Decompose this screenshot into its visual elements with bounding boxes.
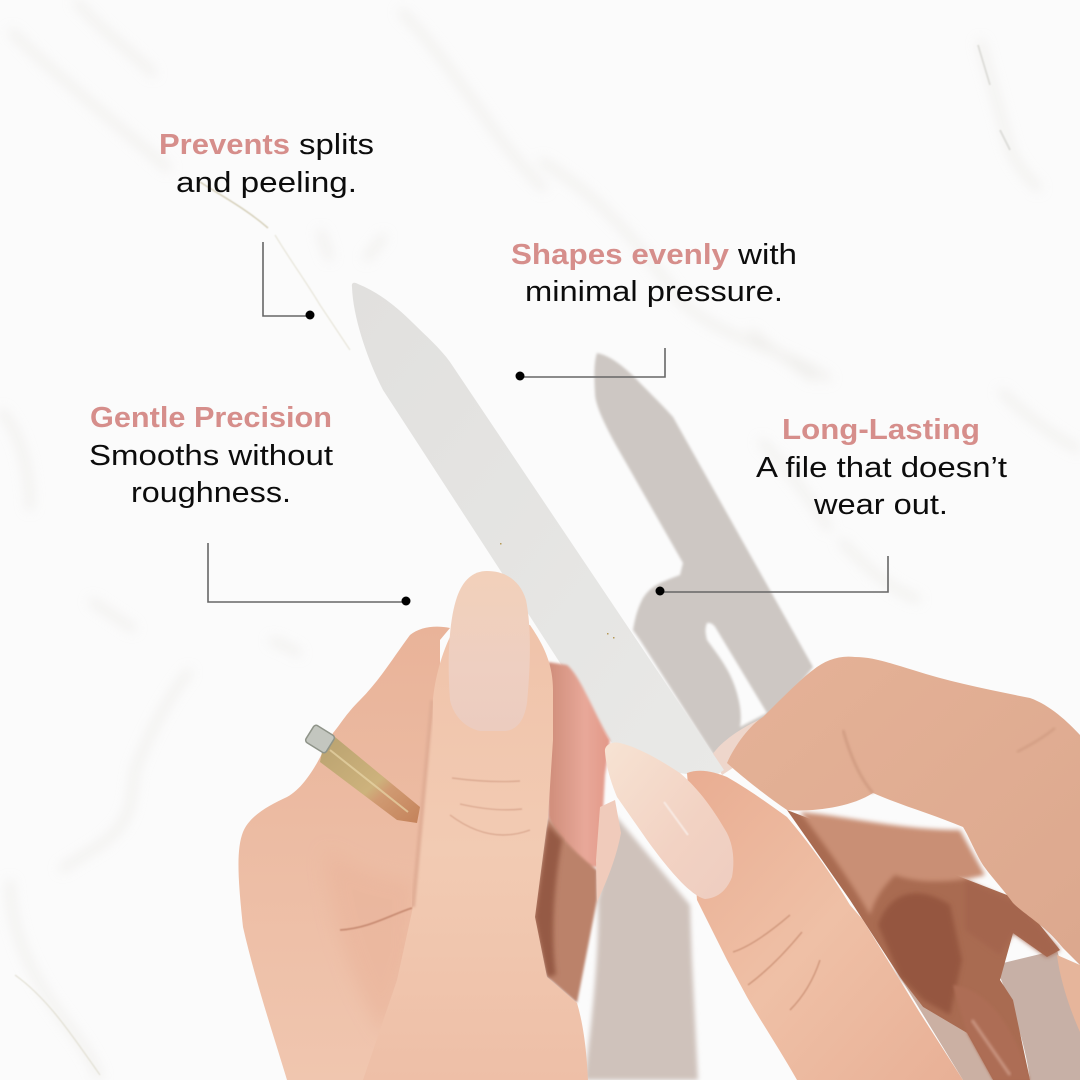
callout: long-lasting: Long-Lasting (782, 414, 980, 446)
index nail (605, 742, 733, 899)
peeking fingernails (712, 715, 770, 775)
callout: shapes evenly: Shapes evenly (511, 239, 729, 271)
callout: long-lasting: wear out. (813, 489, 948, 521)
middle finger (548, 662, 610, 867)
lower right skin (1057, 955, 1080, 1032)
index finger (687, 771, 963, 1080)
lower shadow (584, 815, 1080, 1080)
thumb (363, 620, 588, 1080)
nail file (352, 283, 724, 778)
leader line: gentle (208, 543, 410, 606)
callout: long-lasting (756, 414, 1007, 521)
ring (305, 724, 420, 823)
leader line: long-lasting (656, 556, 888, 596)
left hand (238, 571, 621, 1080)
file shadow (594, 353, 813, 765)
callout: prevents splits: Prevents (159, 129, 290, 161)
callout: shapes evenly: with (737, 239, 797, 271)
callout: gentle precision: Gentle Precision (90, 402, 332, 434)
thumb nail (449, 571, 530, 731)
callout: prevents splits (159, 129, 374, 199)
callout: gentle precision: Smooths without (89, 440, 333, 472)
leader line: shapes (516, 348, 665, 380)
back of hand (238, 627, 450, 1080)
callout: gentle precision: roughness. (131, 477, 291, 509)
side nail sliver (596, 800, 621, 902)
callout: long-lasting: A file that doesn’t (756, 452, 1007, 484)
dark gap behind thumb (533, 817, 597, 1003)
callout: prevents splits: and peeling. (176, 167, 357, 199)
leader line: prevents (263, 242, 314, 320)
callout: shapes evenly: minimal pressure. (525, 276, 783, 308)
right hand: inner curled fingers (712, 715, 1060, 1080)
callout: shapes evenly (511, 239, 797, 308)
right hand (605, 657, 1080, 1080)
callout: gentle precision (89, 402, 333, 509)
callout: prevents splits: splits (299, 129, 374, 161)
back of right hand (727, 657, 1080, 965)
